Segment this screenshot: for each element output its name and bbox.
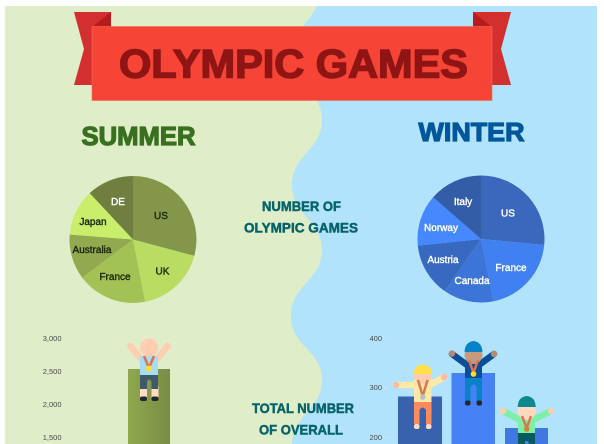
bar: winter right <box>505 428 548 444</box>
pie chart: summer <box>70 176 196 303</box>
banner body <box>92 26 492 100</box>
label: total number of overall: OF OVERALL <box>259 422 343 438</box>
pie chart: summer: US <box>154 211 168 222</box>
pie chart: summer: UK <box>156 266 170 278</box>
bar: winter middle <box>452 373 495 444</box>
heading: winter: WINTER <box>418 119 524 147</box>
axis: summer <box>43 334 62 442</box>
pie chart: winter: Italy <box>454 197 472 208</box>
pie chart: summer: DE <box>111 197 125 208</box>
bar: summer <box>128 369 170 444</box>
athlete: winter left <box>393 364 447 429</box>
axis: winter: 300 <box>369 383 382 392</box>
pie chart: winter: Canada <box>454 276 490 287</box>
banner left fold <box>92 12 111 27</box>
label: total number of overall <box>252 400 354 438</box>
pie chart: winter: France <box>495 263 527 274</box>
athlete: summer <box>130 338 168 401</box>
pie chart: summer: Japan <box>79 217 107 228</box>
axis: summer: 3,000 <box>43 334 62 343</box>
bar: winter left <box>398 396 442 444</box>
pie chart: summer: Australia <box>73 245 112 256</box>
axis: summer: 2,500 <box>43 367 62 376</box>
banner right tail <box>473 12 511 85</box>
label: number of olympic games: NUMBER OF <box>262 198 341 214</box>
label: number of olympic games <box>244 198 358 236</box>
axis: summer: 1,500 <box>43 433 62 442</box>
axis: winter: 200 <box>369 433 382 442</box>
athlete: winter middle <box>449 341 497 406</box>
banner right fold <box>473 12 492 27</box>
pie chart: winter: US <box>501 208 515 220</box>
pie chart: winter <box>417 176 544 302</box>
banner left tail <box>74 12 111 85</box>
axis: summer: 2,000 <box>43 400 62 409</box>
label: number of olympic games: OLYMPIC GAMES <box>244 220 358 236</box>
label: total number of overall: TOTAL NUMBER <box>252 400 354 416</box>
title banner <box>74 12 511 100</box>
heading: summer: SUMMER <box>82 123 196 151</box>
pie chart: summer: France <box>99 272 131 283</box>
background: summer side <box>5 0 322 444</box>
axis: winter: 400 <box>369 334 382 343</box>
athlete: winter right <box>500 396 554 444</box>
pie chart: winter: Austria <box>427 255 459 266</box>
title: OLYMPIC GAMES <box>119 42 468 86</box>
pie chart: winter: Norway <box>424 223 458 234</box>
axis: winter <box>369 334 388 442</box>
